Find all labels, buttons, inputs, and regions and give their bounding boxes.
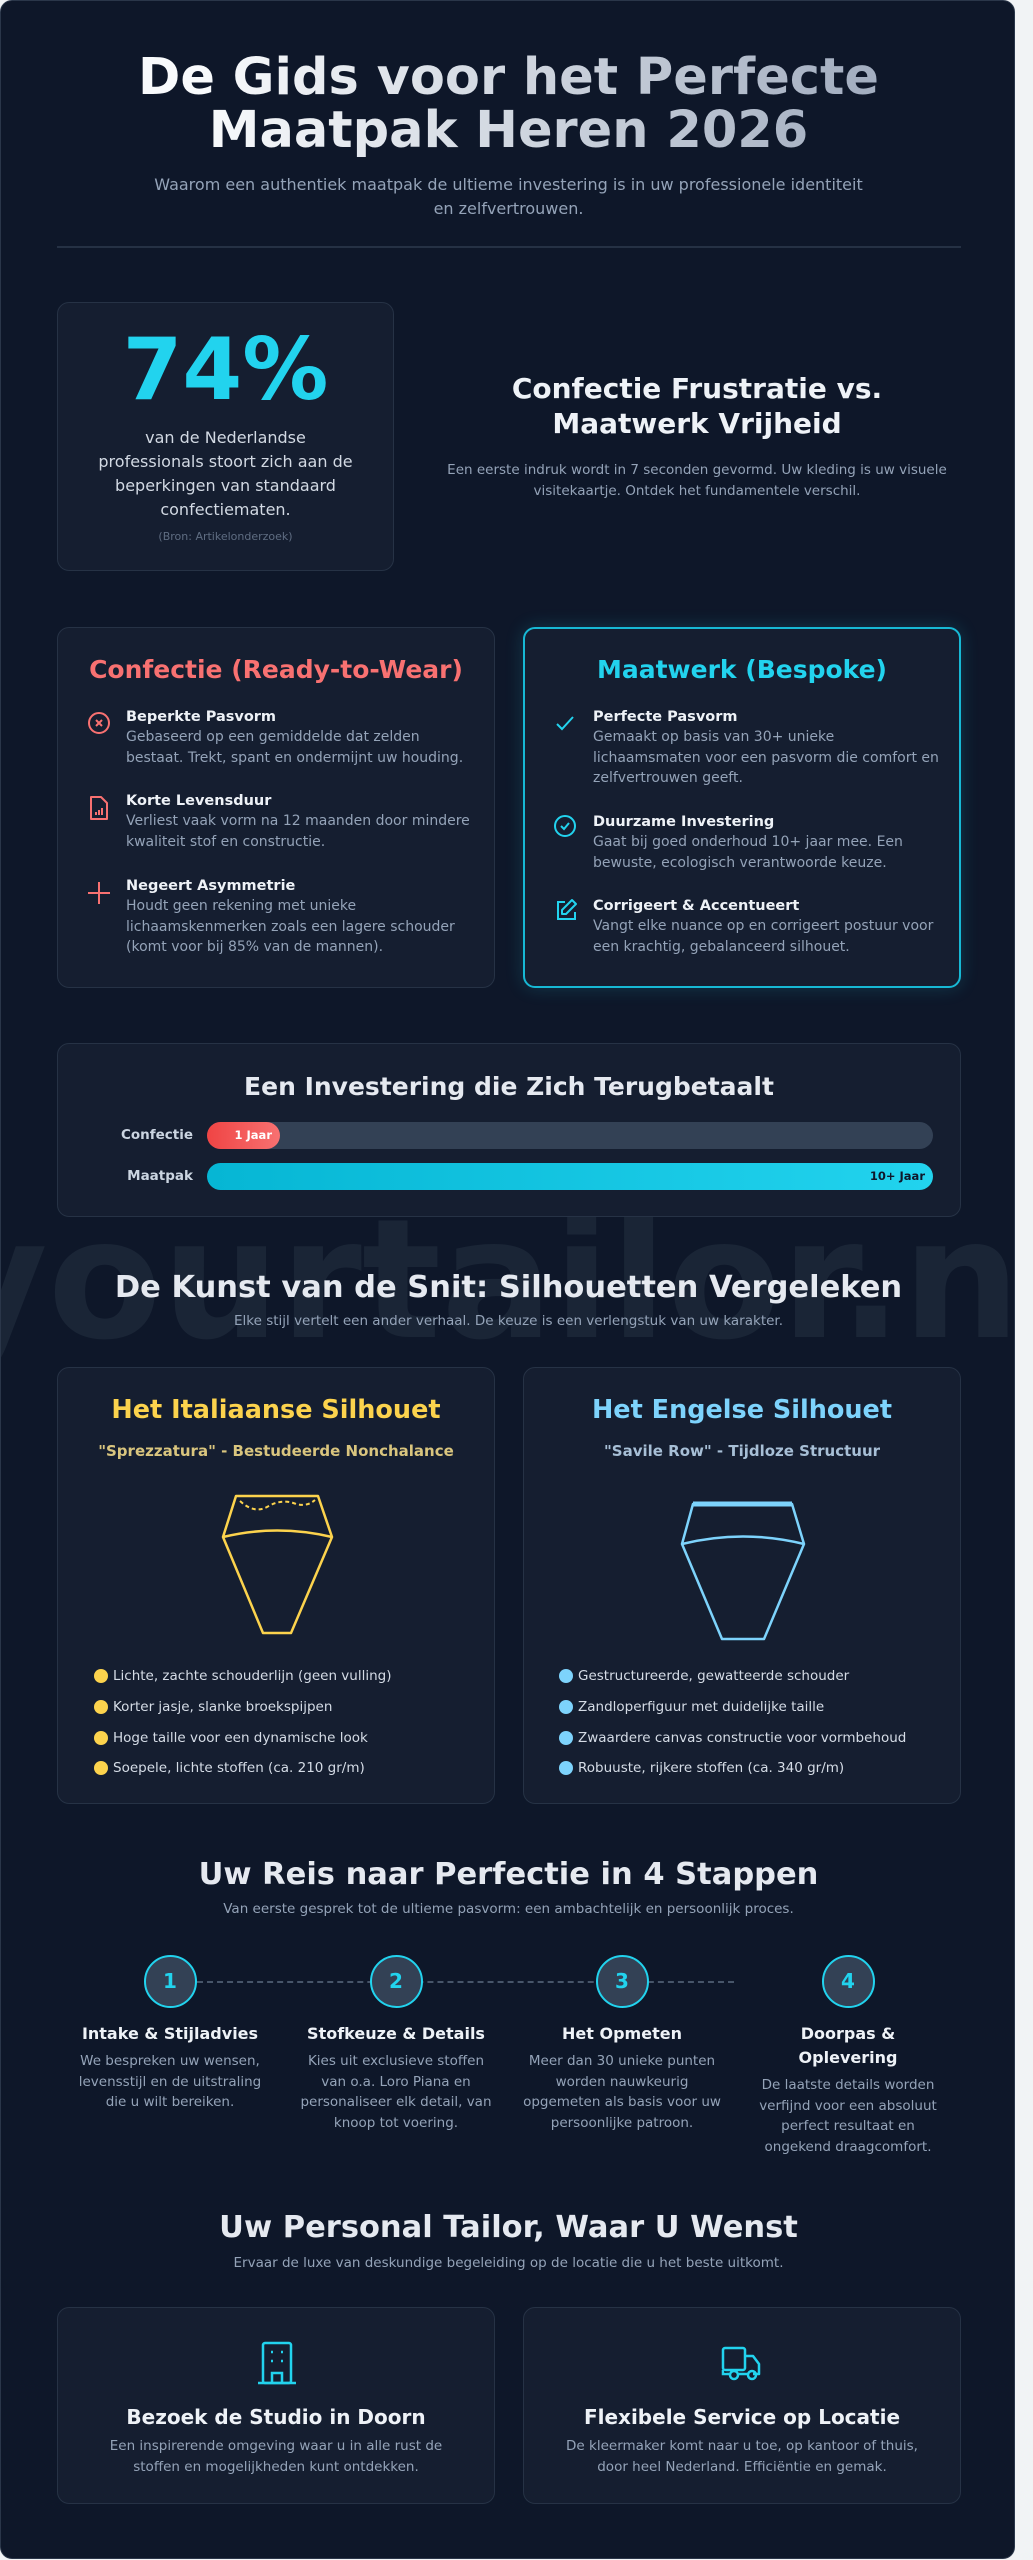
locatie text: De kleermaker komt naar u toe, op kantoor of thuis, door heel Nederland. Efficiëntie en gemak. (566, 2438, 918, 2474)
item beperkte pasvorm (126, 709, 463, 766)
item negeert asymmetrie: Negeert Asymmetrie (126, 878, 295, 894)
heading maatwerk: Maatwerk (Bespoke) (597, 655, 887, 684)
subtitle: en zelfvertrouwen. (434, 199, 583, 218)
item beperkte pasvorm: bestaat. Trekt, spant en ondermijnt uw houding. (126, 750, 463, 766)
panel: confectie (57, 627, 495, 988)
stat text: confectiematen. (160, 500, 291, 519)
item duurzame investering: bewuste, ecologisch verantwoorde keuze. (593, 854, 887, 870)
icon: italian jacket (222, 1494, 334, 1634)
step 4: De laatste details worden verfijnd voor een absoluut perfect resultaat en ongekend draagcomfort. (759, 2077, 937, 2154)
card: studio (57, 2307, 495, 2504)
intro heading: Confectie Frustratie vs. (512, 372, 882, 405)
icon: x circle (88, 712, 110, 734)
sub: stappen: Van eerste gesprek tot de ultieme pasvorm: een ambachtelijk en persoonlijk proces. (223, 1901, 794, 1917)
subtitle: Waarom een authentiek maatpak de ultieme investering is in uw professionele identiteit (154, 175, 863, 194)
icon: file chart (90, 796, 108, 820)
item perfecte pasvorm: zelfvertrouwen geeft. (593, 770, 743, 786)
item korte levensduur: Korte Levensduur (126, 793, 271, 809)
bar: maatpak (127, 1163, 933, 1190)
bar: confectie: 1 Jaar (235, 1128, 272, 1142)
item duurzame investering: Duurzame Investering (593, 814, 774, 830)
icon: building (258, 2342, 296, 2384)
panel: maatwerk (523, 627, 961, 988)
chart heading: Een Investering die Zich Terugbetaalt (244, 1072, 774, 1101)
english subtitle: "Savile Row" - Tijdloze Structuur (604, 1442, 880, 1460)
bar: maatpak: Maatpak (127, 1168, 193, 1184)
circle 1: 1 (163, 1969, 177, 1993)
item perfecte pasvorm: Perfecte Pasvorm (593, 709, 738, 725)
studio title: Bezoek de Studio in Doorn (126, 2405, 426, 2429)
item perfecte pasvorm: Gemaakt op basis van 30+ unieke (593, 729, 834, 745)
english bullets (559, 1668, 906, 1776)
card: locatie (523, 2307, 961, 2504)
item corrigeert: Vangt elke nuance op en corrigeert postuur voor (593, 918, 933, 934)
english bullets: Gestructureerde, gewatteerde schouder (578, 1668, 849, 1684)
intro paragraph: Een eerste indruk wordt in 7 seconden gevormd. Uw kleding is uw visuele (447, 462, 947, 478)
step 3 (523, 1955, 721, 2130)
step 1: We bespreken uw wensen, levensstijl en de uitstraling die u wilt bereiken. (79, 2053, 261, 2110)
english bullets: Zandloperfiguur met duidelijke taille (578, 1699, 824, 1715)
icon: plus (88, 882, 110, 904)
panel: italian (57, 1367, 495, 1804)
icon: truck (722, 2346, 760, 2380)
sub: personal tailor: Ervaar de luxe van deskundige begeleiding op de locatie die u het beste uitkomt. (234, 2255, 784, 2271)
item corrigeert: Corrigeert & Accentueert (593, 898, 799, 914)
step 1: Intake & Stijladvies (82, 2024, 258, 2043)
english bullets: Robuuste, rijkere stoffen (ca. 340 gr/m) (578, 1760, 844, 1776)
item negeert asymmetrie: (komt voor bij 85% van de mannen). (126, 939, 383, 955)
heading: personal tailor: Uw Personal Tailor, Waar U Wenst (219, 2210, 798, 2245)
step 2 (300, 1955, 492, 2130)
circle 2 (370, 1955, 422, 2008)
italian bullets: Hoge taille voor een dynamische look (113, 1730, 368, 1746)
item korte levensduur: kwaliteit stof en constructie. (126, 834, 325, 850)
circle 3 (596, 1955, 648, 2008)
intro paragraph: visitekaartje. Ontdek het fundamentele verschil. (534, 483, 860, 499)
bar: confectie (121, 1122, 933, 1149)
intro heading (512, 372, 882, 440)
circle 3: 3 (615, 1969, 629, 1993)
italian title: Het Italiaanse Silhouet (111, 1395, 441, 1425)
item negeert asymmetrie (126, 878, 455, 955)
studio text: Een inspirerende omgeving waar u in alle rust de stoffen en mogelijkheden kunt ontdekken. (110, 2438, 442, 2474)
item duurzame investering: Gaat bij goed onderhoud 10+ jaar mee. Een (593, 834, 903, 850)
stat text: professionals stoort zich aan de (98, 452, 353, 471)
italian bullets: Soepele, lichte stoffen (ca. 210 gr/m) (113, 1760, 365, 1776)
step 3: Het Opmeten (562, 2024, 682, 2043)
italian bullets: Lichte, zachte schouderlijn (geen vulling) (113, 1668, 392, 1684)
heading: stappen: Uw Reis naar Perfectie in 4 Stappen (199, 1857, 818, 1892)
item corrigeert (593, 898, 934, 954)
intro paragraph (447, 462, 947, 499)
circle 1 (144, 1955, 196, 2008)
icon: english jacket (680, 1502, 806, 1640)
step 4: Doorpas & (801, 2024, 895, 2043)
heading confectie: Confectie (Ready-to-Wear) (89, 655, 463, 684)
intro heading: Maatwerk Vrijheid (552, 407, 842, 440)
circle 4 (822, 1955, 874, 2008)
step 2: Stofkeuze & Details (307, 2024, 485, 2043)
stat text: van de Nederlandse (145, 428, 306, 447)
bar: maatpak: 10+ Jaar (870, 1169, 925, 1183)
item beperkte pasvorm: Gebaseerd op een gemiddelde dat zelden (126, 729, 420, 745)
icon: check (556, 716, 574, 730)
icon: edit (557, 899, 577, 920)
item negeert asymmetrie: Houdt geen rekening met unieke (126, 898, 356, 914)
title (1, 51, 1016, 157)
circle 2: 2 (389, 1969, 403, 1993)
english bullets: Zwaardere canvas constructie voor vormbehoud (578, 1730, 906, 1746)
panel: investment bar chart (57, 1043, 961, 1217)
italian subtitle: "Sprezzatura" - Bestudeerde Nonchalance (98, 1442, 454, 1460)
title: De Gids voor het Perfecte (138, 48, 879, 107)
item duurzame investering (593, 814, 903, 870)
big number: 74% (123, 320, 328, 420)
item perfecte pasvorm: lichaamsmaten voor een pasvorm die comfort en (593, 750, 939, 766)
step 4: Oplevering (799, 2048, 897, 2067)
panel: english (523, 1367, 961, 1804)
item perfecte pasvorm (593, 709, 939, 786)
item corrigeert: een krachtig, gebalanceerd silhouet. (593, 938, 850, 954)
item korte levensduur: Verliest vaak vorm na 12 maanden door mindere (126, 813, 470, 829)
step 1 (79, 1955, 261, 2110)
item korte levensduur (126, 793, 470, 850)
stat text: beperkingen van standaard (115, 476, 336, 495)
item negeert asymmetrie: lichaamskenmerken zoals een lagere schouder (126, 918, 455, 934)
italian bullets (94, 1668, 392, 1776)
step 4 (759, 1955, 937, 2154)
english title: Het Engelse Silhouet (592, 1395, 892, 1425)
bar: confectie: Confectie (121, 1127, 193, 1143)
subtitle (154, 175, 863, 218)
sub: silhouetten: Elke stijl vertelt een ander verhaal. De keuze is een verlengstuk van uw karakter. (234, 1313, 783, 1329)
circle 4: 4 (841, 1969, 855, 1993)
italian bullets: Korter jasje, slanke broekspijpen (113, 1699, 332, 1715)
title: Maatpak Heren 2026 (209, 101, 808, 160)
stat card: 74% (57, 302, 394, 571)
heading: silhouetten: De Kunst van de Snit: Silhouetten Vergeleken (115, 1270, 902, 1305)
stat text (98, 428, 353, 519)
icon: check circle (554, 815, 576, 837)
source: (Bron: Artikelonderzoek) (158, 530, 293, 543)
step 2: Kies uit exclusieve stoffen van o.a. Loro Piana en personaliseer elk detail, van knoop tot voering. (300, 2053, 492, 2130)
step 3: Meer dan 30 unieke punten worden nauwkeurig opgemeten als basis voor uw persoonlijke patroon. (523, 2053, 721, 2130)
item beperkte pasvorm: Beperkte Pasvorm (126, 709, 276, 725)
locatie title: Flexibele Service op Locatie (584, 2405, 900, 2429)
